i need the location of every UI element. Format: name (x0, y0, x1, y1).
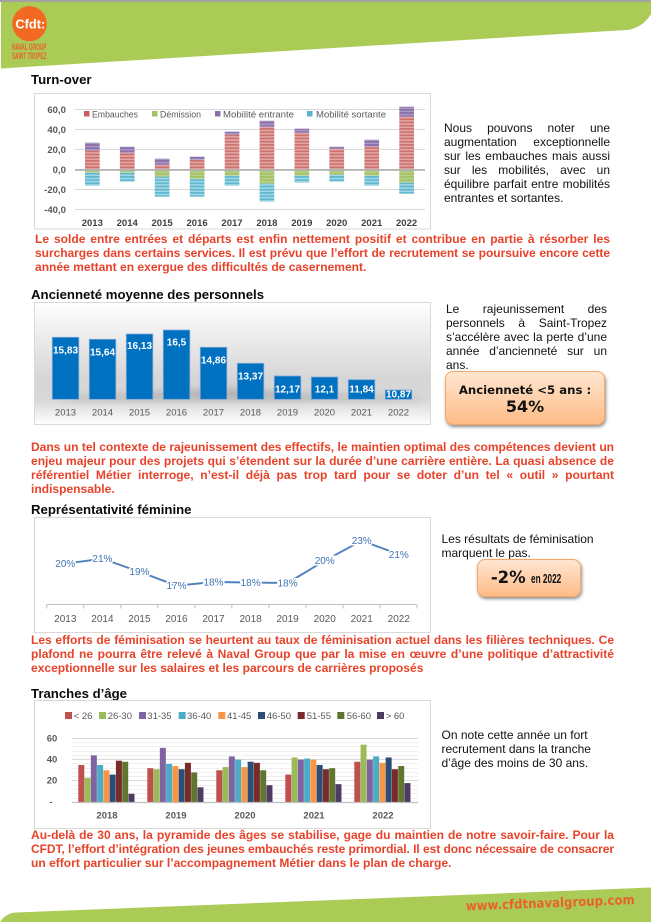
paragraph: tranches d'âge analysis: CFDT, l’effort d’intégration des jeunes embauchés reste primordial. Il est donc nécessaire de consacrer (31, 842, 614, 856)
legend: 41-45 (227, 711, 251, 722)
paragraph: ancienneté analysis: référentiel Métier interroge, n’est-il déjà pas trop tard pour se doter d’un tel « outil » pourtant (31, 468, 614, 482)
paragraph: féminisation analysis: Les efforts de féminisation se heurtent au taux de féminisation actuel dans les filières techniques. Ce (31, 633, 614, 647)
text: ancienneté comment: s’accélère avec la perte d’une (446, 330, 607, 344)
legend: Mobilité entrante (223, 110, 294, 120)
paragraph: ancienneté analysis: Dans un tel contexte de rajeunissement des effectifs, le maintien optimal des compétences devient un (31, 440, 614, 454)
paragraph: tranches d'âge analysis: un effort particulier sur l’accompagnement Métier dans le plan de charge. (31, 856, 451, 870)
years: 2022 (388, 614, 410, 625)
bar values: 16,5 (167, 337, 187, 348)
text: turn-over comment: équilibre parfait entre mobilités (444, 177, 610, 191)
data labels: 21% (389, 550, 409, 561)
data labels: 18% (241, 578, 261, 589)
y axis labels: -40,0 (44, 205, 66, 216)
heading: tranches d'âge: Tranches d’âge (31, 686, 127, 701)
callout: ancienneté <5 ans: Ancienneté <5 ans : (459, 383, 591, 397)
text: tranches d'âge comment: d’âge des moins de 30 ans. (442, 756, 588, 770)
years: 2013 (55, 408, 76, 418)
bar values: 15,83 (53, 345, 78, 356)
years: 2020 (314, 408, 335, 418)
years: 2016 (166, 408, 187, 418)
bar values (53, 337, 411, 400)
years: 2019 (277, 408, 298, 418)
grouped bars (78, 745, 410, 802)
x axis years: 2020 (326, 218, 347, 229)
text: turn-over comment: augmentation exceptionnelle (444, 135, 610, 149)
y axis labels: 40,0 (47, 125, 66, 136)
bar values: 13,37 (238, 371, 263, 382)
legend: 56-60 (347, 711, 371, 722)
legend: Mobilité sortante (316, 110, 386, 120)
bar values: 14,86 (201, 355, 226, 366)
heading: ancienneté: Ancienneté moyenne des personnels (31, 287, 264, 302)
paragraph: ancienneté analysis (31, 440, 614, 496)
paragraph: turn-over analysis: année mettant en exergue des difficultés de casernement. (35, 260, 366, 274)
callout: ancienneté <5 ans (445, 371, 605, 425)
data labels: 19% (129, 567, 150, 578)
legend (84, 110, 386, 120)
stacked bars (85, 107, 414, 202)
bar values: 12,17 (275, 384, 300, 395)
y axis labels: 20,0 (47, 145, 66, 156)
text: turn-over comment: entrantes et sortantes. (444, 191, 563, 205)
years (55, 408, 409, 418)
paragraph: tranches d'âge analysis: Au-delà de 30 ans, la pyramide des âges se stabilise, gage du maintien de notre savoir-faire. Pour la (31, 828, 614, 842)
data labels: 23% (352, 536, 372, 547)
text: ancienneté comment: Le rajeunissement des (446, 302, 607, 316)
years: 2014 (91, 614, 114, 625)
legend: < 26 (74, 711, 92, 722)
years: 2015 (128, 614, 151, 625)
x axis years: 2021 (361, 218, 383, 229)
data labels: 21% (92, 554, 113, 565)
years: 2014 (92, 408, 113, 418)
text: ancienneté comment: ans. (446, 358, 469, 372)
legend: 31-35 (147, 711, 172, 722)
chart: ancienneté bars (34, 302, 431, 425)
y axis labels: 0,0 (53, 165, 66, 176)
x axis years (82, 218, 417, 229)
y axis labels: 60 (47, 734, 57, 744)
text: turn-over comment: sur les embauches mais aussi (444, 149, 610, 163)
x axis years: 2019 (291, 218, 312, 229)
legend (65, 711, 404, 722)
line (65, 541, 399, 586)
legend: Embauches (92, 110, 138, 120)
data labels: 18% (203, 578, 224, 588)
heading: turn-over: Turn-over (31, 72, 92, 87)
years: 2019 (276, 614, 299, 625)
data labels: 20% (315, 556, 335, 567)
text: tranches d'âge comment (442, 728, 591, 770)
legend: 36-40 (187, 711, 211, 722)
heading: représentativité féminine: Représentativité féminine (31, 502, 192, 517)
bar shadow (60, 388, 420, 400)
x axis years: 2015 (152, 218, 173, 229)
paragraph: tranches d'âge analysis (31, 828, 614, 870)
y axis labels: -20,0 (44, 185, 66, 196)
chart: turn-over stacked bars (34, 93, 431, 230)
legend: 26-30 (108, 711, 132, 722)
years: 2017 (202, 614, 225, 625)
x axis years: 2016 (187, 218, 208, 229)
years: 2020 (314, 614, 336, 625)
callout: -2% en 2022 (477, 559, 581, 597)
bar values: 15,64 (90, 347, 115, 358)
years: 2016 (165, 614, 188, 625)
years: 2020 (234, 810, 256, 822)
x axis years: 2014 (117, 218, 138, 229)
footer band (0, 888, 651, 922)
years: 2018 (239, 614, 262, 625)
y axis labels: - (49, 797, 53, 808)
x axis years: 2017 (221, 218, 243, 229)
callout: -2% en 2022: en 2022 (531, 572, 562, 586)
y axis labels (44, 105, 66, 216)
years: 2021 (351, 408, 372, 418)
paragraph: turn-over analysis (35, 232, 610, 274)
data labels: 18% (278, 578, 298, 590)
text: tranches d'âge comment: On note cette année un fort (442, 728, 588, 742)
text: féminisation comment (442, 532, 594, 560)
years (54, 614, 410, 625)
text: tranches d'âge comment: recrutement dans la tranche (442, 742, 591, 756)
text: ancienneté comment (446, 302, 607, 372)
data labels: 17% (166, 581, 187, 592)
bar values: 11,84 (349, 384, 374, 395)
bar values: 12,1 (315, 384, 335, 395)
paragraph: ancienneté analysis: indispensable. (31, 482, 115, 496)
legend: > 60 (386, 711, 404, 722)
paragraph: turn-over analysis: surcharges dans certains services. Il est prévu que l’effort de recrutement se poursuive encore cette (35, 246, 610, 260)
website url: www.cfdtnavalgroup.com (466, 893, 635, 914)
years: 2015 (129, 408, 150, 418)
chart: représentativité line (34, 517, 431, 633)
text: féminisation comment: Les résultats de féminisation (442, 532, 594, 546)
legend: 51-55 (307, 711, 331, 722)
legend: 46-50 (267, 711, 291, 722)
years: 2019 (165, 810, 187, 822)
paragraph: turn-over analysis: Le solde entre entrées et départs est enfin nettement positif et contribue en partie à résorber les (35, 232, 610, 246)
paragraph: féminisation analysis (31, 633, 614, 675)
header band (0, 0, 651, 68)
bars (52, 330, 412, 399)
text: turn-over comment: sur les mobilités, avec un (444, 163, 610, 177)
years: 2018 (240, 408, 261, 418)
y axis labels: 40 (47, 754, 57, 766)
x axis years: 2018 (256, 218, 277, 229)
bar values: 16,13 (127, 341, 152, 352)
text: ancienneté comment: personnels à Saint-Tropez (446, 316, 607, 330)
text: féminisation comment: marquent le pas. (442, 546, 531, 560)
text: ancienneté comment: année d’ancienneté sur un (446, 344, 607, 358)
axis (47, 604, 417, 608)
y axis labels: 20 (47, 776, 57, 786)
years: 2018 (96, 810, 118, 822)
years: 2021 (303, 810, 325, 822)
years: 2017 (203, 408, 224, 418)
x axis years: 2013 (82, 218, 103, 229)
years: 2022 (372, 810, 394, 822)
logo (12, 6, 47, 61)
y axis labels (47, 734, 57, 808)
paragraph: ancienneté analysis: enjeu majeur pour des projets qui s’étendent sur la durée d’une carrière entière. La quasi absence de (31, 454, 614, 468)
legend: Démission (160, 110, 201, 120)
logo: Cfdt: (15, 16, 45, 31)
chart: tranches d'âge grouped bars (34, 700, 431, 829)
callout: -2% en 2022: -2% (491, 568, 526, 587)
data labels (55, 536, 409, 592)
years: 2021 (351, 614, 373, 625)
x axis years: 2022 (396, 218, 417, 229)
years (96, 810, 394, 822)
text: turn-over comment: Nous pouvons noter une (444, 121, 610, 135)
years: 2013 (54, 614, 77, 625)
paragraph: féminisation analysis: exceptionnelle sur les salaires et les parcours de carrières proposés (31, 661, 423, 675)
callout: ancienneté <5 ans: 54% (506, 397, 544, 416)
data labels: 20% (55, 559, 75, 570)
y axis labels: 60,0 (47, 105, 66, 116)
bar values: 10,87 (386, 389, 411, 400)
paragraph: féminisation analysis: plafond ne pourra être relevé à Naval Group que par la mise en œuvre d’une politique d’attractivité (31, 647, 614, 661)
text: turn-over comment (444, 121, 610, 205)
years: 2022 (388, 408, 409, 418)
